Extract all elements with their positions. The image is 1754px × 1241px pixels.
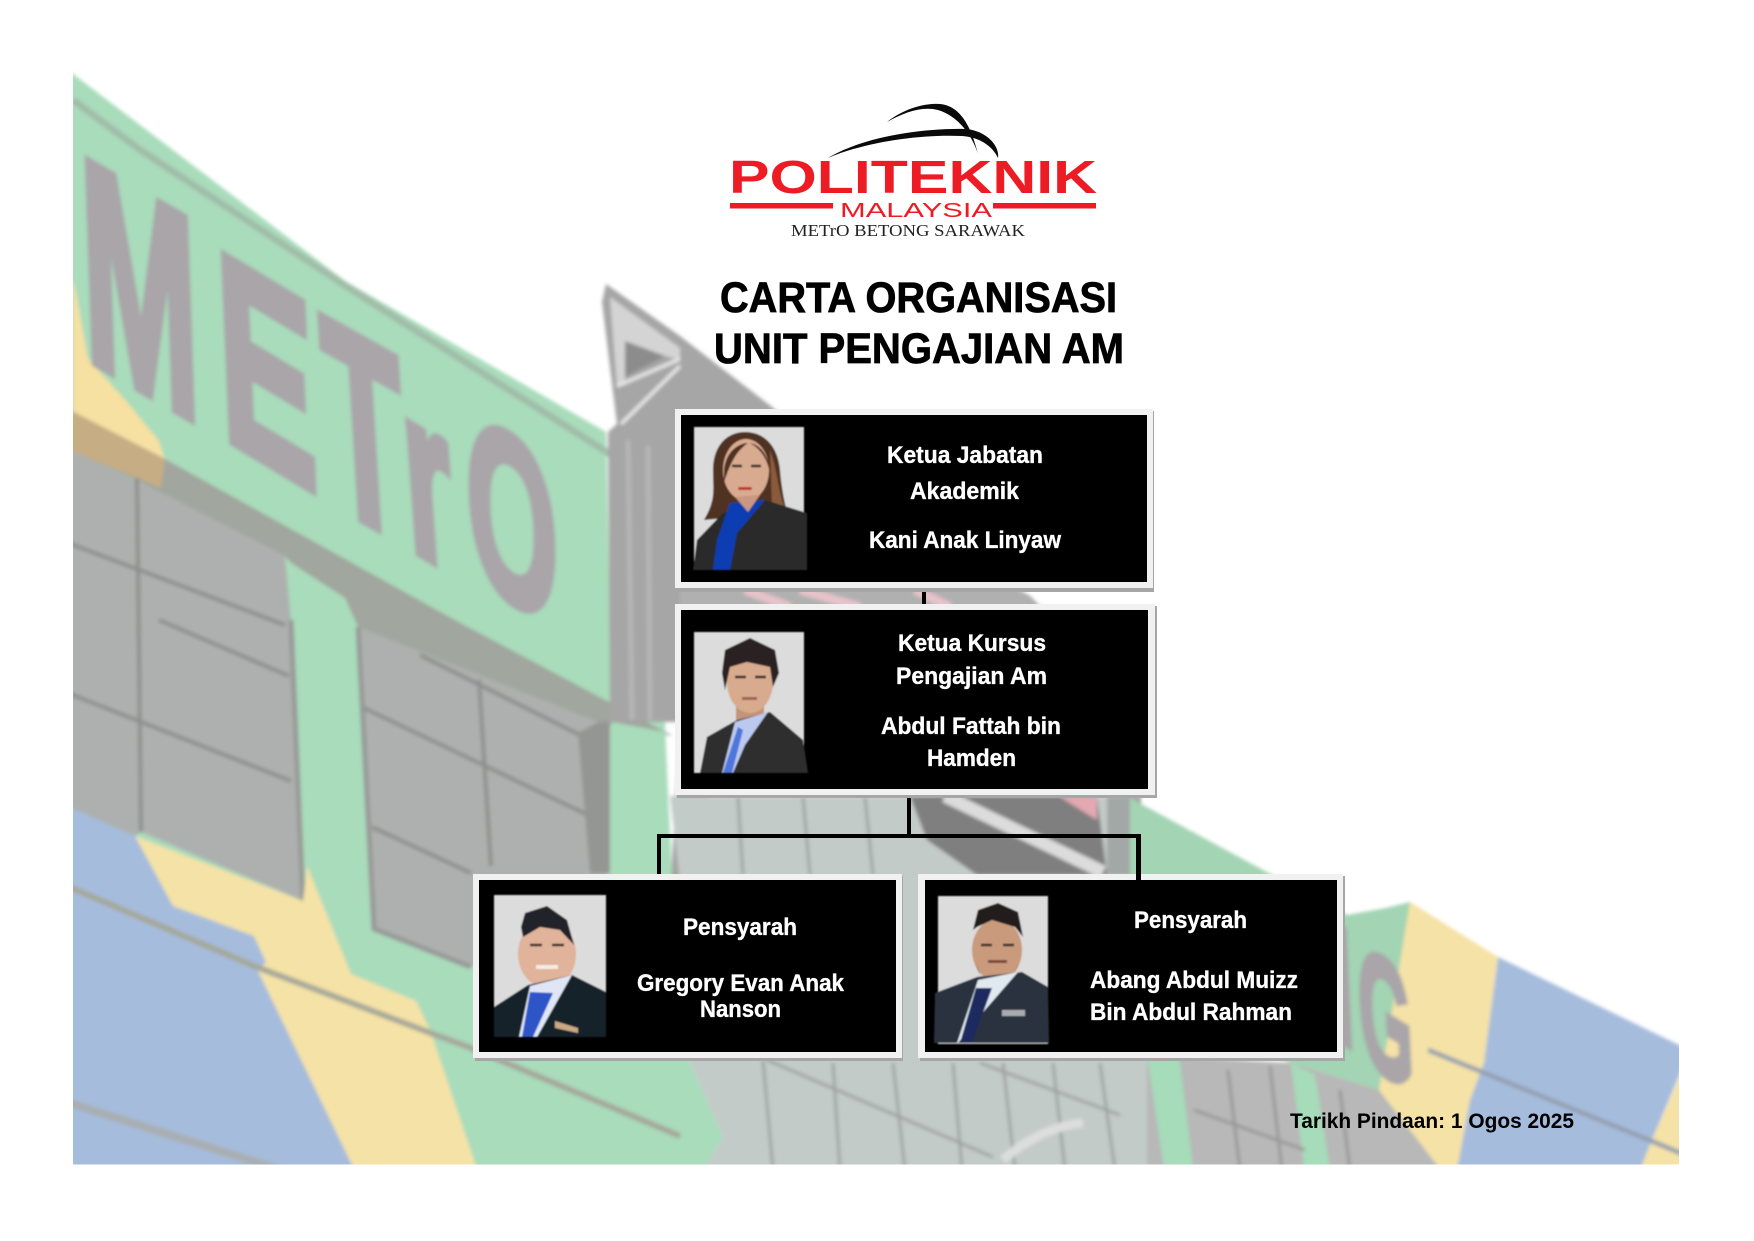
glass front <box>670 796 1165 1175</box>
windows left <box>60 446 303 901</box>
role and name: Ketua Kursus <box>898 630 1046 657</box>
role and name: Pensyarah <box>1134 907 1247 934</box>
photo: Abang Abdul Muizz <box>934 896 1049 1044</box>
logo: Politeknik Malaysia METrO Betong Sarawak <box>729 104 1097 240</box>
role and name: Abang Abdul Muizz <box>1090 967 1298 994</box>
sign lettering: E <box>211 191 322 551</box>
panel: Ketua Kursus Pengajian Am <box>675 604 1157 798</box>
role and name: Abdul Fattah bin <box>881 713 1061 740</box>
tower <box>602 284 1040 880</box>
right green sign <box>1130 798 1410 1090</box>
panel: Ketua Jabatan Akademik <box>675 409 1154 592</box>
title <box>714 274 1124 373</box>
photo: Kani Anak Linyaw <box>693 427 807 570</box>
role and name <box>637 914 845 1023</box>
logo wordmark: POLITEKNIK <box>729 151 1097 203</box>
role and name: Kani Anak Linyaw <box>869 527 1061 554</box>
sign lettering: T <box>315 257 413 604</box>
panel: Pensyarah Gregory <box>473 874 903 1061</box>
title: CARTA ORGANISASI <box>720 274 1117 322</box>
role and name: Gregory Evan Anak <box>637 970 845 997</box>
role and name: Bin Abdul Rahman <box>1090 999 1292 1026</box>
logo rule right <box>993 203 1096 208</box>
green wall <box>60 64 723 1175</box>
role and name: Nanson <box>700 996 781 1023</box>
role and name: Ketua Jabatan <box>887 442 1043 469</box>
role and name <box>881 630 1061 772</box>
role and name: Akademik <box>910 478 1020 505</box>
gap strip between panels <box>682 592 1034 604</box>
sign lettering: G <box>1354 907 1417 1130</box>
role and name <box>869 442 1061 554</box>
role and name <box>1090 907 1298 1026</box>
logo rule left <box>730 203 833 208</box>
logo subtitle: MALAYSIA <box>840 200 993 222</box>
panel: Pensyarah Abang <box>918 874 1345 1061</box>
role and name: Pengajian Am <box>896 663 1047 690</box>
logo swoosh <box>828 104 998 158</box>
blue and yellow cladding <box>60 803 357 1175</box>
photo: Abdul Fattah bin Hamden <box>694 632 808 773</box>
sign lettering: O <box>462 359 562 681</box>
connector lines <box>657 590 1141 882</box>
logo campus name: METrO BETONG SARAWAK <box>791 221 1026 240</box>
revision date: Tarikh Pindaan: 1 Ogos 2025 <box>1290 1110 1574 1133</box>
photo: Gregory Evan Anak Nanson <box>494 895 606 1037</box>
title: UNIT PENGAJIAN AM <box>714 325 1124 373</box>
sign lettering <box>83 154 1414 1086</box>
right yellow and blue <box>1379 902 1498 1175</box>
sign lettering: N <box>1298 867 1357 1087</box>
sign lettering: M <box>76 93 204 486</box>
sign lettering: r <box>393 325 461 628</box>
role and name: Hamden <box>927 745 1016 772</box>
role and name: Pensyarah <box>683 914 797 941</box>
